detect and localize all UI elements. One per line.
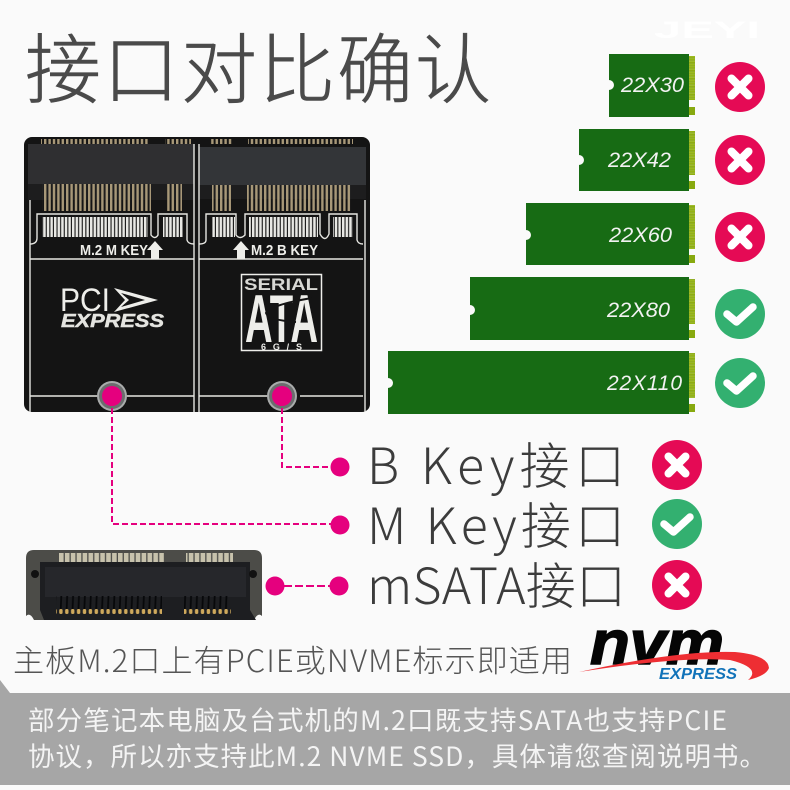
contact pads [42, 217, 353, 237]
icon: 22X42 cross [715, 135, 765, 185]
logo: PCI Express [60, 282, 164, 331]
icon: 22X60 cross [715, 212, 765, 262]
label: M.2 B KEY: M.2 B KEY [251, 242, 318, 259]
icon: mSATA cross [652, 560, 702, 610]
logo: Serial ATA: ATA [245, 281, 318, 357]
mounting hole B key [267, 381, 297, 411]
watermark logo: JEYI [654, 17, 760, 44]
B key connector [199, 147, 366, 211]
icon: 22X80 check [715, 289, 765, 339]
label: M.2 B KEY [233, 241, 318, 259]
panel: M.2 adapter board [24, 137, 370, 412]
logo: NVM Express: nvm [590, 609, 724, 678]
top pins [41, 139, 353, 144]
mounting hole M key [97, 381, 127, 411]
logo: PCI Express: PCI [60, 282, 110, 318]
label: B Key: B Key接口 [367, 427, 625, 499]
SSD card 22X60 [526, 203, 695, 265]
logo: Serial ATA [242, 274, 322, 357]
M key connector [28, 144, 194, 211]
note text line 1: 部分笔记本电脑及台式机的M.2口既支持SATA也支持PCIE [28, 699, 727, 738]
logo: Serial ATA: SERIAL [244, 275, 318, 294]
SSD card 22X30: 22X30 [620, 74, 684, 97]
label: M.2 M KEY: M.2 M KEY [80, 242, 148, 259]
label: M Key: M Key接口 [367, 487, 625, 559]
SSD card 22X60: 22X60 [608, 224, 672, 247]
SSD card 22X80: 22X80 [606, 299, 670, 322]
note text line 2: 协议，所以亦支持此M.2 NVME SSD，具体请您查阅说明书。 [28, 735, 766, 774]
connector line: mSATA [266, 576, 348, 596]
SSD card 22X80 [470, 277, 695, 340]
logo: PCI Express: EXPRESS [61, 311, 164, 331]
connector line: M key [112, 408, 350, 534]
title: 接口对比确认 [25, 9, 491, 119]
icon: M key check [652, 499, 702, 549]
icon: 22X30 cross [715, 62, 765, 112]
connector line: B key [282, 408, 350, 476]
logo: NVM Express [579, 609, 769, 683]
panel: bottom note [0, 680, 790, 790]
icon: 22X110 check [715, 358, 765, 408]
note: motherboard marking: 主板M.2口上有PCIE或NVME标示即适用 [13, 636, 572, 681]
label: mSATA: mSATA接口 [367, 547, 626, 619]
logo: Serial ATA: 6G/S [261, 342, 302, 352]
photo: mSATA connector [26, 550, 262, 620]
icon: B key cross [652, 440, 702, 490]
logo: NVM Express: EXPRESS [659, 666, 737, 683]
SSD card 22X110 [388, 351, 695, 414]
SSD card 22X110: 22X110 [606, 372, 682, 395]
board outlines [30, 144, 365, 412]
SSD card 22X30 [609, 54, 695, 117]
SSD card 22X42 [579, 129, 695, 191]
SSD card 22X42: 22X42 [607, 149, 671, 172]
